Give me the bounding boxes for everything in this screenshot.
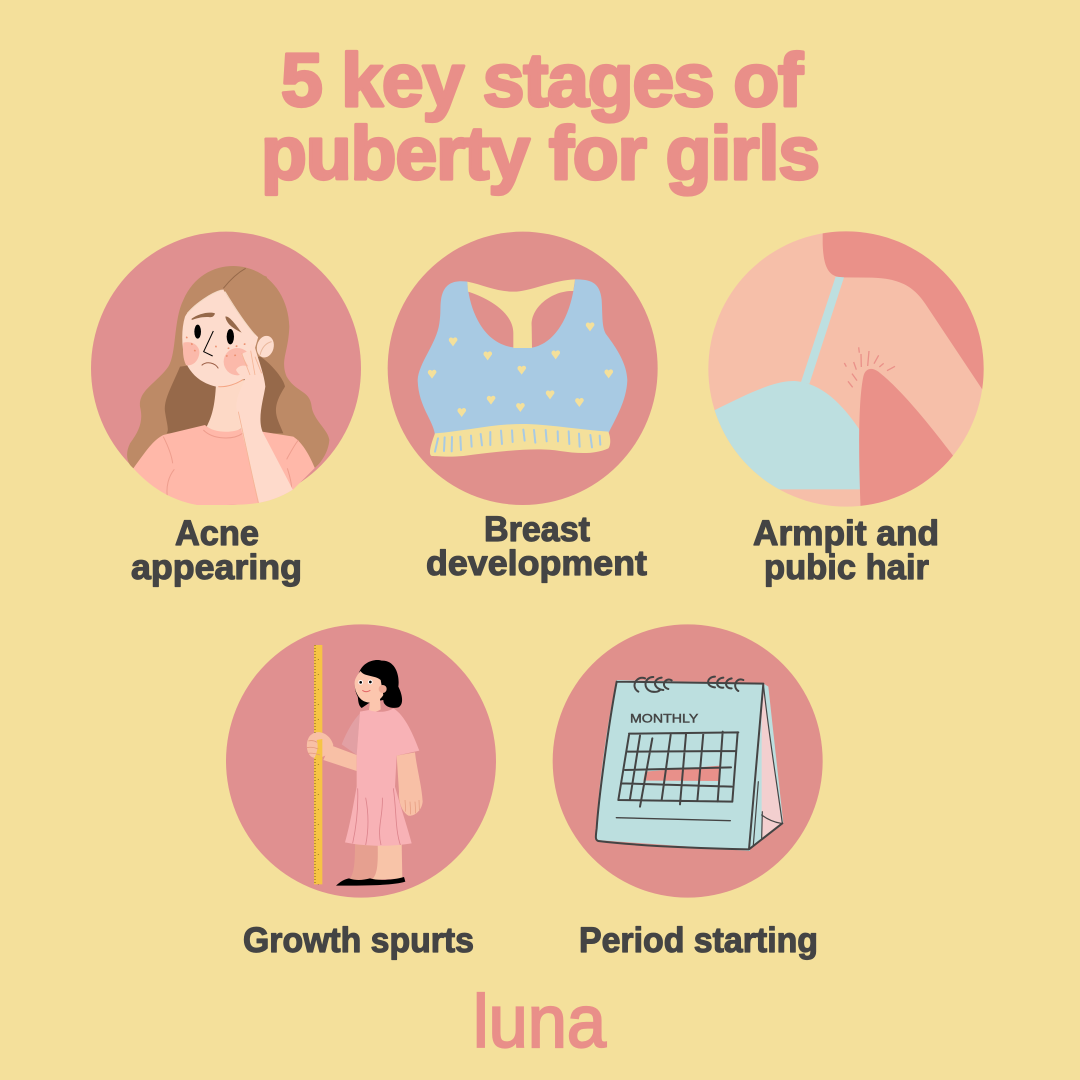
illustration: girl standing bbox=[307, 660, 423, 886]
illustration: desk calendar bbox=[596, 677, 783, 851]
title: 5 key stages of bbox=[281, 38, 804, 122]
illustration: armpit bbox=[714, 231, 984, 506]
label: armpit and pubic hair bbox=[753, 514, 939, 587]
label: armpit and pubic hair: pubic hair bbox=[764, 548, 929, 587]
circle background bbox=[91, 232, 361, 505]
illustration: ruler bbox=[314, 645, 322, 884]
label: breast development: Breast bbox=[484, 510, 590, 549]
label: breast development: development bbox=[426, 544, 647, 583]
highlighted period days bbox=[643, 766, 720, 781]
circle background bbox=[708, 231, 984, 507]
calendar grid bbox=[618, 732, 738, 807]
illustration: girl with acne bbox=[127, 266, 329, 507]
logo: luna: luna bbox=[473, 980, 607, 1063]
circle background bbox=[553, 624, 823, 898]
infographic canvas bbox=[91, 50, 984, 1049]
label: acne appearing: appearing bbox=[131, 548, 302, 587]
title: puberty for girls bbox=[261, 111, 820, 195]
panel: period starting bbox=[553, 624, 823, 898]
illustration: bra bbox=[418, 279, 627, 457]
calendar heading: MONTHLY bbox=[630, 713, 699, 726]
label: acne appearing bbox=[131, 514, 302, 587]
title bbox=[261, 38, 820, 195]
label: acne appearing: Acne bbox=[175, 514, 259, 553]
label: armpit and pubic hair: Armpit and bbox=[753, 514, 939, 553]
panel: acne bbox=[91, 232, 361, 507]
label: growth spurts: Growth spurts bbox=[243, 921, 474, 960]
panel: growth spurts bbox=[226, 624, 496, 898]
calendar rings bbox=[635, 677, 743, 692]
label: breast development bbox=[426, 510, 647, 583]
label: period starting: Period starting bbox=[579, 921, 818, 960]
circle background bbox=[226, 624, 496, 898]
panel: breast development bbox=[388, 232, 658, 505]
circle background bbox=[388, 232, 658, 505]
panel: armpit and pubic hair bbox=[708, 231, 984, 506]
